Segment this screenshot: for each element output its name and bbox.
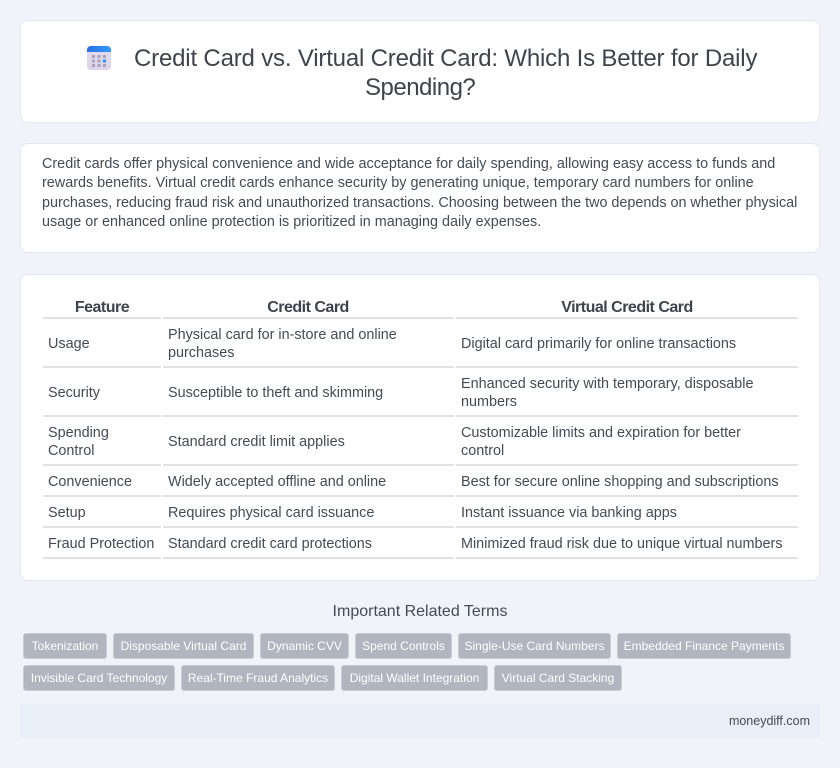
row: usage: Usage [48,336,90,352]
row: fraud protection: Fraud Protection [48,536,154,552]
panel: title header [20,20,820,123]
title [134,45,758,101]
row: security: Enhanced security with temporary, disposable [461,376,754,392]
tag list: related terms: Digital Wallet Integration [350,671,479,685]
tag list: related terms [23,633,791,691]
row: convenience: Convenience [48,474,132,490]
row: usage [48,327,736,361]
row: spending control: control [461,443,504,459]
text block: description: rewards benefits. Virtual credit cards enhance security by generating unique, temporary card numbers for online [42,175,754,191]
panel: description [20,143,820,253]
row: usage: Digital card primarily for online transactions [461,336,736,352]
row: spending control: Customizable limits and expiration for better [461,425,741,441]
title: Spending? [365,74,475,101]
row: convenience: Widely accepted offline and online [168,474,386,490]
row: setup: Requires physical card issuance [168,505,374,521]
row: convenience [48,474,779,490]
title: Credit Card vs. Virtual Credit Card: Which Is Better for Daily [134,45,757,72]
row: convenience: Best for secure online shopping and subscriptions [461,474,779,490]
row: usage: purchases [168,345,234,361]
text block: description: purchases, reducing fraud risk and unauthorized transactions. Choosing between the two depends on whether physical [42,195,797,211]
row: spending control [48,425,741,459]
table header: Virtual Credit Card [561,299,693,316]
panel: comparison table [20,274,820,581]
heading: important related terms: Important Related Terms [333,603,507,620]
row: fraud protection: Minimized fraud risk due to unique virtual numbers [461,536,783,552]
row: usage: Physical card for in-store and online [168,327,397,343]
tag list: related terms: Spend Controls [362,639,445,653]
text block: description [42,156,797,230]
tag list: related terms: Embedded Finance Payments [624,639,784,653]
row: setup [48,505,677,521]
row: spending control: Control [48,443,94,459]
row: spending control: Spending [48,425,109,441]
row: security: Susceptible to theft and skimming [168,385,383,401]
tag list: related terms: Tokenization [32,639,98,653]
table header: Feature [75,299,129,316]
tag list: related terms: Real-Time Fraud Analytics [188,671,328,685]
tag list: related terms: Disposable Virtual Card [121,639,246,653]
tag list: related terms: Invisible Card Technology [31,671,167,685]
tag list: related terms: Virtual Card Stacking [502,671,614,685]
tag list: related terms: Dynamic CVV [267,639,342,653]
row: security: Security [48,385,100,401]
row: fraud protection: Standard credit card protections [168,536,372,552]
row: setup: Setup [48,505,86,521]
row: security [48,376,754,410]
tag list: related terms: Single-Use Card Numbers [464,639,605,653]
text block: description: usage or enhanced online protection is prioritized in managing daily expenses. [42,214,541,230]
table header [75,299,693,316]
table header: Credit Card [267,299,349,316]
icon: calendar [87,46,111,70]
row: setup: Instant issuance via banking apps [461,505,677,521]
text block: description: Credit cards offer physical convenience and wide acceptance for daily spending, allowing easy access to funds and [42,156,775,172]
row: fraud protection [48,536,783,552]
footer [20,704,820,738]
row: spending control: Standard credit limit applies [168,434,345,450]
footer source text: moneydiff.com [729,714,810,728]
row: security: numbers [461,394,517,410]
